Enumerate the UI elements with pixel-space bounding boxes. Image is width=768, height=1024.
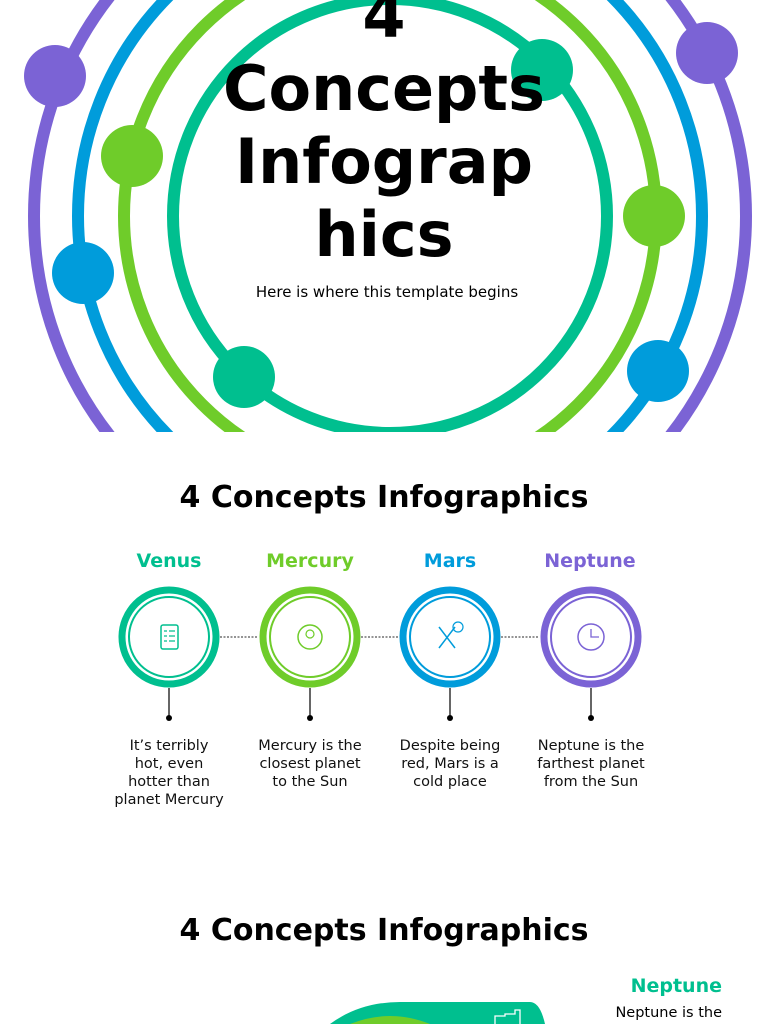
descriptions: hotter than <box>128 774 210 790</box>
hero subtitle: Here is where this template begins <box>256 283 518 301</box>
bottom label: Neptune <box>631 975 722 997</box>
heading 2: 4 Concepts Infographics <box>180 480 588 515</box>
hero title: Infograp <box>235 125 533 198</box>
hero title: Concepts <box>223 52 545 125</box>
timeline circles <box>118 586 642 721</box>
text: Mercury is the closest planet to the Sun <box>258 738 362 790</box>
text: Despite being red, Mars is a cold place <box>400 738 500 790</box>
descriptions: hot, even <box>135 756 203 772</box>
bottom shape <box>330 1002 545 1024</box>
heading 3: 4 Concepts Infographics <box>180 913 588 948</box>
hero title <box>223 0 545 271</box>
descriptions: It’s terribly <box>130 738 208 754</box>
descriptions <box>114 738 224 808</box>
bottom text: Neptune is the <box>615 1005 722 1021</box>
text: Neptune <box>544 550 636 572</box>
descriptions: planet Mercury <box>114 792 224 808</box>
hero title: hics <box>314 198 454 271</box>
text: Mars <box>424 550 476 572</box>
hero: orbit rings <box>24 0 752 432</box>
text: Mercury <box>266 550 354 572</box>
labels: Venus <box>137 550 201 572</box>
text: Neptune is the farthest planet from the Sun <box>537 738 645 790</box>
